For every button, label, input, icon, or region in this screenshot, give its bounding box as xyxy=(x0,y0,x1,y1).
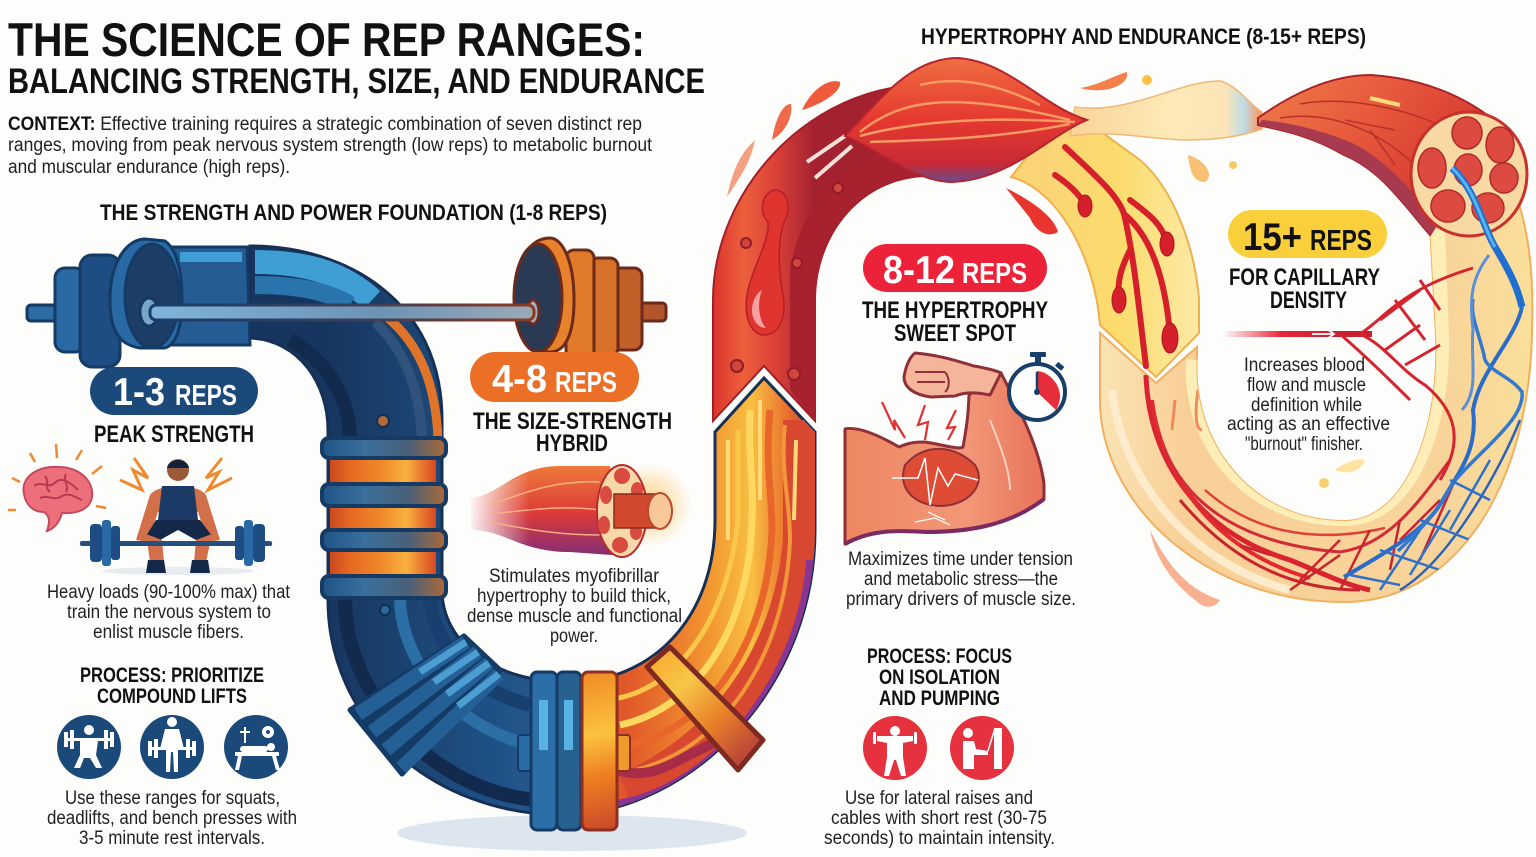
process heading: compound lifts: COMPOUND LIFTS xyxy=(97,685,247,708)
yellow upper band with red drips xyxy=(1011,120,1199,377)
angled orange clamp xyxy=(647,647,763,770)
pill: 8-12 reps: 8-12 xyxy=(883,249,955,292)
text: compound lifts usage: Use these ranges for squats, xyxy=(65,788,280,809)
continuous pipe: blue to orange xyxy=(250,246,815,815)
orange barbell plates xyxy=(514,238,666,358)
heading: strength and power foundation: THE STRENGTH AND POWER FOUNDATION (1-8 REPS) xyxy=(100,200,607,225)
pipe orange heated section xyxy=(330,456,436,578)
icon: deadlift athlete xyxy=(80,458,272,575)
pill: 4-8 reps: 4-8 xyxy=(492,358,547,401)
text: hypertrophy description: and metabolic stress—the xyxy=(864,569,1058,590)
barbell shaft xyxy=(150,305,534,320)
pill: 15+ reps: REPS xyxy=(1310,225,1372,257)
text: peak strength description: train the nervous system to xyxy=(67,602,271,623)
label: size-strength hybrid: THE SIZE-STRENGTH xyxy=(473,408,672,435)
label: size-strength hybrid: HYBRID xyxy=(536,430,608,457)
context text block: and muscular endurance (high reps). xyxy=(8,157,290,178)
label: capillary density: FOR CAPILLARY xyxy=(1229,264,1380,291)
text: size-strength description xyxy=(467,566,682,647)
text: peak strength description: Heavy loads (90-100% max) that xyxy=(47,582,291,603)
context text block xyxy=(8,114,653,178)
icon: squat xyxy=(57,715,121,779)
text: compound lifts usage: 3-5 minute rest intervals. xyxy=(79,828,265,849)
label: hypertrophy sweet spot: SWEET SPOT xyxy=(894,320,1016,347)
text: size-strength description: hypertrophy to build thick, xyxy=(477,586,671,607)
text: capillary description xyxy=(1227,355,1390,455)
text: peak strength description: enlist muscle fibers. xyxy=(93,622,244,643)
title xyxy=(8,13,705,101)
process heading: isolation and pumping: ON ISOLATION xyxy=(879,666,1000,689)
label: hypertrophy sweet spot xyxy=(862,297,1048,347)
muscle cross section xyxy=(1411,112,1527,307)
process heading: compound lifts: PROCESS: PRIORITIZE xyxy=(80,664,264,687)
ground shadow xyxy=(397,815,747,851)
bend clamps xyxy=(350,636,500,774)
text: size-strength description: dense muscle and functional xyxy=(467,606,682,627)
text: isolation usage: seconds) to maintain intensity. xyxy=(824,828,1055,849)
text: capillary description: definition while xyxy=(1251,395,1362,416)
text: isolation usage xyxy=(824,788,1055,849)
context text block: CONTEXT: Effective training requires a strategic combination of seven distinct rep xyxy=(8,114,642,135)
title: BALANCING STRENGTH, SIZE, AND ENDURANCE xyxy=(8,62,705,101)
icon: bench press xyxy=(224,715,288,779)
icon: stopwatch xyxy=(1009,352,1065,420)
context text block: ranges, moving from peak nervous system strength (low reps) to metabolic burnout xyxy=(8,135,653,156)
process heading: isolation and pumping xyxy=(867,645,1012,710)
text: peak strength description xyxy=(47,582,291,643)
label: capillary density xyxy=(1229,264,1380,314)
tendon link xyxy=(1070,81,1262,140)
text: compound lifts usage xyxy=(47,788,297,849)
pill: 8-12 reps: REPS xyxy=(962,258,1027,290)
process heading: isolation and pumping: PROCESS: FOCUS xyxy=(867,645,1012,668)
text: size-strength description: Stimulates myofibrillar xyxy=(489,566,660,587)
title: THE SCIENCE OF REP RANGES: xyxy=(8,13,645,66)
heading: hypertrophy and endurance: HYPERTROPHY AND ENDURANCE (8-15+ REPS) xyxy=(921,24,1366,49)
label: size-strength hybrid xyxy=(473,408,672,457)
second muscle belly xyxy=(1258,75,1500,235)
icon: lateral raise xyxy=(863,716,927,780)
icon: brain xyxy=(8,444,106,531)
text: capillary description: acting as an effective xyxy=(1227,414,1390,435)
vertical pipe clamps xyxy=(322,438,446,598)
pill: 1-3 reps xyxy=(90,367,258,415)
text: capillary description: "burnout" finisher. xyxy=(1245,434,1363,455)
text: compound lifts usage: deadlifts, and bench presses with xyxy=(47,808,297,829)
icon: cable pushdown xyxy=(950,716,1014,780)
process heading: isolation and pumping: AND PUMPING xyxy=(879,687,1000,710)
muscle arch xyxy=(713,85,925,421)
blue barbell plates xyxy=(27,239,182,367)
capillary artery with arrow xyxy=(1225,255,1489,480)
pill: 15+ reps xyxy=(1228,210,1387,259)
splash droplets xyxy=(727,72,1365,607)
icon: muscle with myofibril core xyxy=(471,463,692,557)
pill: 1-3 reps: 1-3 xyxy=(113,371,165,414)
bottom clamps xyxy=(518,672,630,830)
pill: 4-8 reps xyxy=(470,352,639,402)
label: hypertrophy sweet spot: THE HYPERTROPHY xyxy=(862,297,1048,324)
pill: 15+ reps: 15+ xyxy=(1243,216,1302,259)
text: hypertrophy description: Maximizes time under tension xyxy=(848,549,1073,570)
text: isolation usage: Use for lateral raises and xyxy=(845,788,1033,809)
pill: 1-3 reps: REPS xyxy=(175,380,237,412)
pill: 8-12 reps xyxy=(863,244,1047,292)
label: capillary density: DENSITY xyxy=(1270,287,1347,314)
label: peak strength: PEAK STRENGTH xyxy=(94,421,254,448)
icon: flexed arm xyxy=(845,353,1044,544)
pipe bolts xyxy=(224,278,390,615)
pill: 4-8 reps: REPS xyxy=(555,367,617,399)
yellow capillary ring xyxy=(1100,180,1532,602)
process heading: compound lifts xyxy=(80,664,264,708)
icon: deadlift xyxy=(140,715,204,779)
text: capillary description: flow and muscle xyxy=(1247,375,1366,396)
text: isolation usage: cables with short rest (30-75 xyxy=(831,808,1047,829)
text: capillary description: Increases blood xyxy=(1244,355,1365,376)
text: hypertrophy description xyxy=(846,549,1076,610)
barbell collar xyxy=(165,247,250,345)
text: hypertrophy description: primary drivers of muscle size. xyxy=(846,589,1076,610)
text: size-strength description: power. xyxy=(550,626,598,647)
muscle belly xyxy=(845,58,1087,182)
